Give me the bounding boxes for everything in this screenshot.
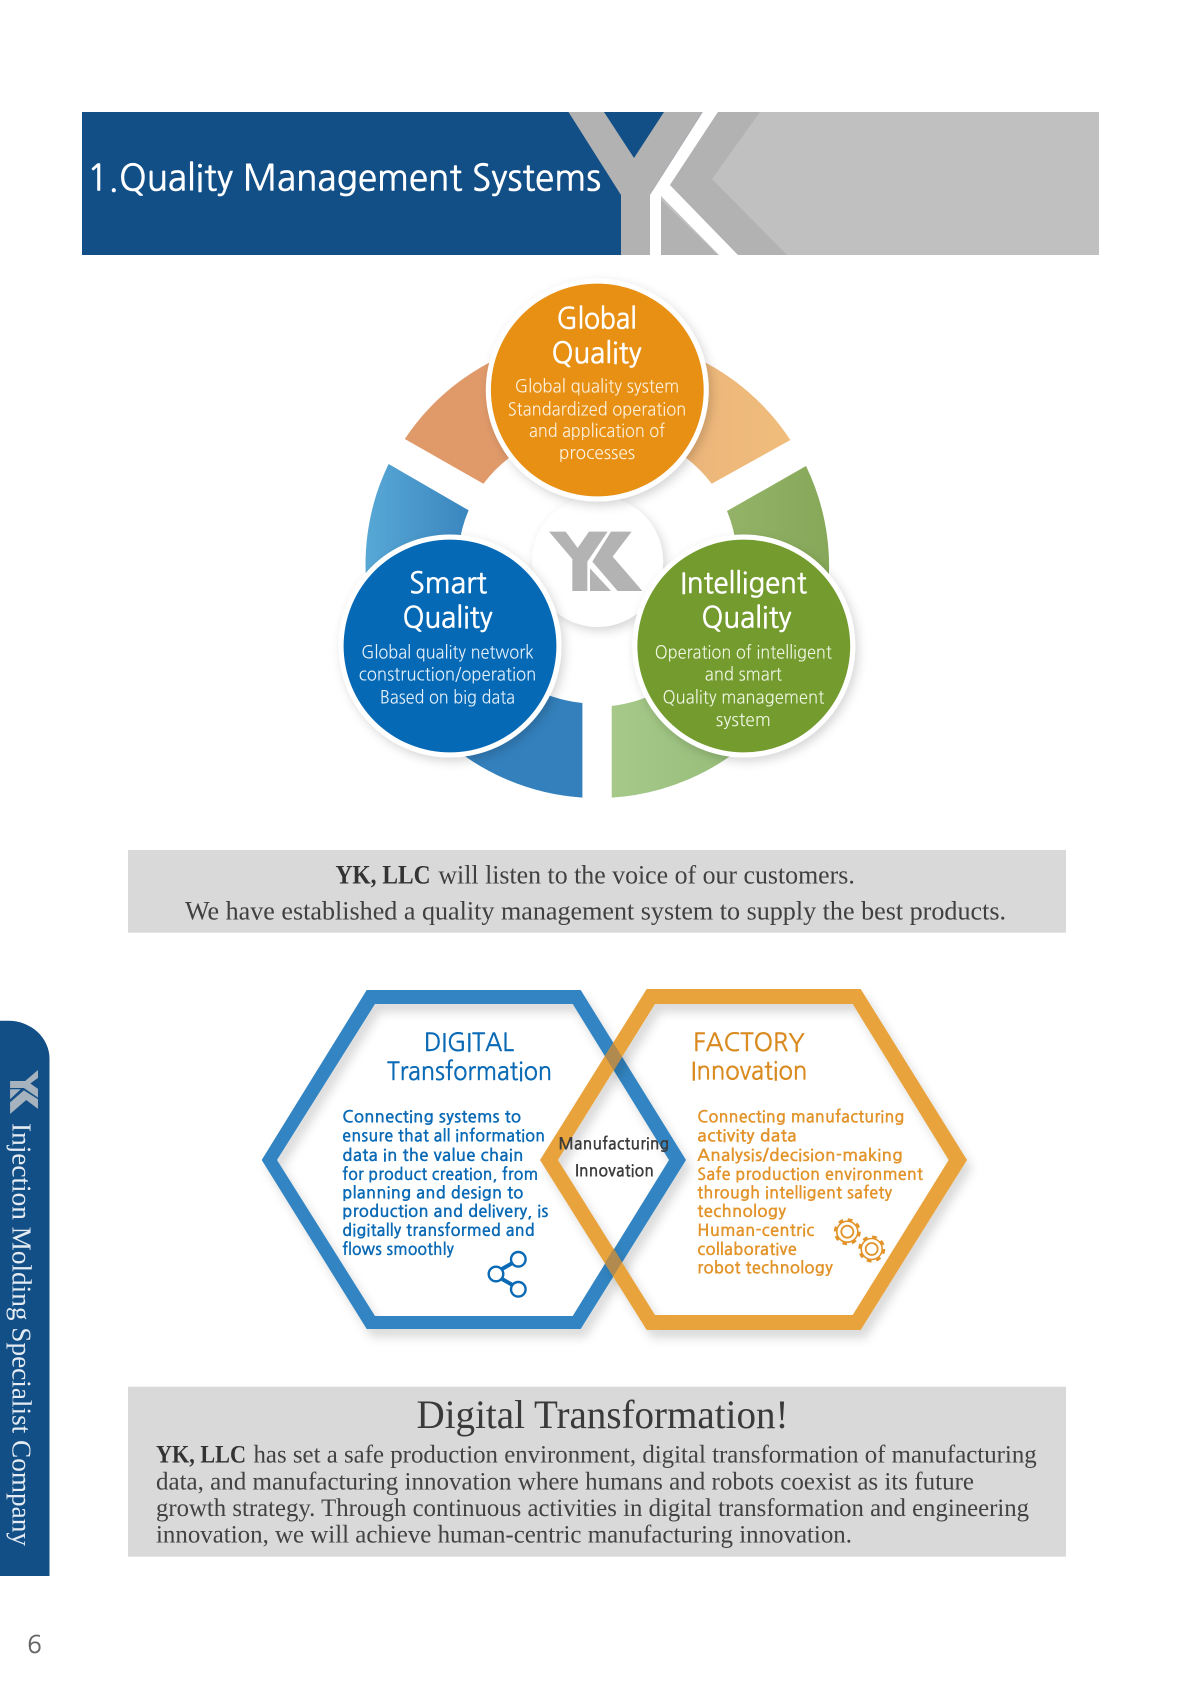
panel: customer statement: We have established a quality management system to supply the best products.: [185, 896, 1006, 926]
panel: factory innovation hexagon: robot technology: [697, 1259, 833, 1276]
panel: digital transformation hexagon: ensure that all information: [342, 1128, 545, 1145]
circle: Global Quality: Global: [557, 305, 637, 334]
circle: Global Quality: [486, 278, 709, 502]
panel: factory innovation hexagon: technology: [697, 1203, 787, 1220]
text block: body paragraph: growth strategy. Through continuous activities in digital transformation and engineering: [156, 1495, 1029, 1522]
heading: section title: 1.Quality Management Systems: [87, 160, 601, 196]
panel: customer statement: YK, LLC: [336, 860, 430, 889]
sidebar label: Injection Molding Specialist Company: [6, 1123, 36, 1547]
circle: Smart Quality: Global quality network: [361, 644, 534, 662]
circle: Smart Quality: Based on big data: [380, 688, 515, 706]
overlap label: manufacturing innovation: [558, 1136, 669, 1180]
text block: body paragraph: has set a safe production environment, digital transformation of manufacturing: [254, 1442, 1037, 1469]
panel: digital transformation hexagon: Connecting systems to: [342, 1110, 521, 1126]
center logo circle: [532, 496, 663, 627]
circle: Smart Quality: Smart: [409, 569, 487, 598]
circle: Intelligent Quality: Operation of intelligent: [655, 644, 832, 662]
panel: factory innovation hexagon: activity data: [697, 1128, 797, 1145]
icon: gears: [835, 1220, 884, 1261]
circle: Global Quality: and application of: [529, 422, 666, 440]
panel: factory innovation hexagon: Safe production environment: [697, 1166, 923, 1183]
icon: share: [489, 1252, 526, 1297]
circle: Smart Quality: construction/operation: [359, 666, 536, 684]
text block: body paragraph: YK, LLC: [156, 1442, 246, 1469]
circle: Intelligent Quality: Intelligent: [680, 569, 807, 598]
panel: digital transformation hexagon: flows smoothly: [342, 1241, 454, 1258]
header banner: [82, 112, 1099, 255]
circle: Intelligent Quality: and smart: [705, 666, 782, 684]
heading: Digital Transformation: Digital Transformation!: [416, 1392, 788, 1437]
panel: digital transformation hexagon: planning and design to: [342, 1184, 524, 1201]
text block: body paragraph: innovation, we will achieve human-centric manufacturing innovation.: [156, 1522, 852, 1549]
panel: factory innovation hexagon: Human-centric: [697, 1223, 815, 1239]
ring segments: [366, 343, 829, 798]
text block: body paragraph: [156, 1442, 1037, 1549]
overlap label: manufacturing innovation: Manufacturing: [558, 1136, 669, 1153]
circle: Intelligent Quality: system: [716, 711, 771, 729]
circle: Smart Quality: [338, 534, 562, 758]
panel: digital transformation hexagon: data in the value chain: [342, 1147, 524, 1164]
circle: Intelligent Quality: [632, 534, 855, 758]
circle: Smart Quality: Quality: [403, 603, 493, 632]
panel: digital transformation hexagon: Transformation: [387, 1059, 552, 1084]
text block: body paragraph: data, and manufacturing innovation where humans and robots coexist as its future: [156, 1468, 974, 1495]
circle: Global Quality: Global quality system: [515, 377, 679, 395]
quality ring diagram: [338, 278, 855, 798]
panel: digital transformation hexagon: for product creation, from: [342, 1166, 538, 1183]
panel: factory innovation hexagon: Connecting manufacturing: [697, 1109, 904, 1126]
panel: customer statement: will listen to the voice of our customers.: [438, 860, 855, 889]
panel: factory innovation hexagon: Innovation: [691, 1058, 807, 1083]
hexagon diagram: [262, 989, 967, 1330]
panel: factory innovation hexagon: through intelligent safety: [697, 1184, 893, 1201]
circle: Global Quality: Standardized operation: [508, 400, 686, 418]
page number: 6: [27, 1633, 42, 1657]
panel: factory innovation hexagon: Analysis/decision-making: [697, 1147, 903, 1164]
panel: digital transformation hexagon: [262, 990, 686, 1329]
panel: digital transformation hexagon: production and delivery, is: [342, 1203, 548, 1220]
panel: factory innovation hexagon: [540, 989, 967, 1330]
panel: digital transformation hexagon: DIGITAL: [424, 1030, 514, 1055]
panel: factory innovation hexagon: collaborative: [697, 1241, 797, 1258]
circle: Global Quality: processes: [559, 444, 635, 462]
circle: Intelligent Quality: Quality: [702, 603, 792, 632]
overlap label: manufacturing innovation: Innovation: [575, 1163, 654, 1180]
icon: YK logo: [549, 532, 642, 591]
circle: Global Quality: Quality: [552, 339, 642, 368]
icon: rotated YK logo: [10, 1070, 38, 1114]
panel: factory innovation hexagon: FACTORY: [693, 1030, 805, 1055]
panel: customer statement: [128, 850, 1066, 933]
panel: digital transformation hexagon: digitally transformed and: [342, 1222, 535, 1239]
circle: Intelligent Quality: Quality management: [662, 688, 825, 706]
sidebar tab: [0, 1021, 50, 1576]
panel: digital transformation statement: [128, 1387, 1066, 1557]
